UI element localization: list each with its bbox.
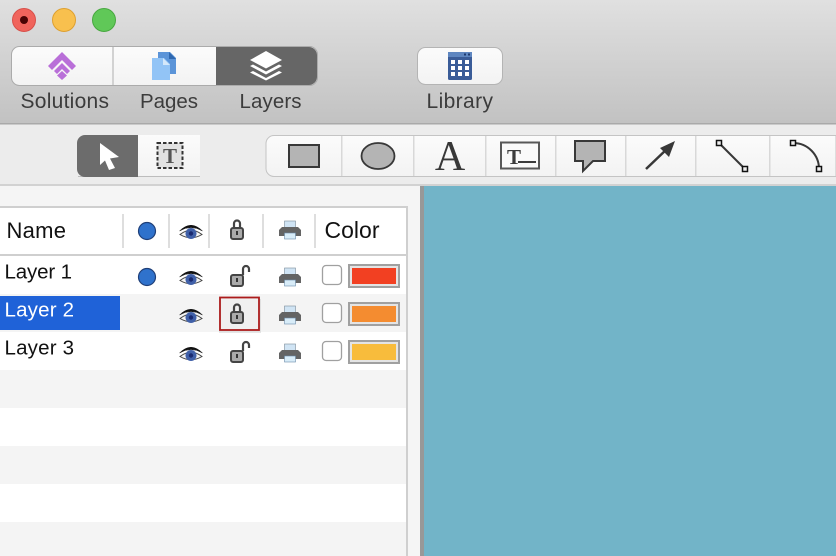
icon: layers	[250, 51, 282, 80]
column header: printer	[279, 221, 301, 239]
active dot	[138, 268, 156, 286]
icon: text box: T	[507, 145, 521, 169]
printer	[279, 344, 301, 362]
icon: library	[448, 52, 472, 80]
column header: active dot	[138, 222, 156, 240]
open lock	[231, 266, 249, 286]
window button: zoom	[92, 8, 116, 32]
title bar	[0, 0, 836, 124]
label: Library: Library	[426, 90, 494, 113]
label: Pages: Pages	[140, 90, 198, 113]
color swatch: orange	[348, 302, 400, 326]
layer name: Layer 1	[4, 260, 72, 284]
layer name: Layer 3	[4, 336, 74, 360]
icon: line	[716, 140, 748, 172]
selection tool group	[77, 135, 200, 177]
icon: ellipse	[362, 143, 394, 169]
printer	[279, 268, 301, 286]
color swatch: red	[348, 264, 400, 288]
tools toolbar	[0, 124, 836, 186]
icon: rectangle	[289, 145, 319, 167]
library button	[418, 48, 502, 84]
row: Layer 3	[4, 336, 400, 364]
eye	[180, 347, 202, 361]
segmented tabs	[12, 46, 318, 86]
color swatch: yellow	[348, 340, 400, 364]
checkbox	[322, 342, 342, 360]
eye	[180, 271, 202, 285]
icon: text selection: T	[163, 144, 177, 168]
column header: eye	[180, 225, 202, 239]
icon: solutions	[48, 52, 76, 80]
selection highlight	[0, 296, 120, 330]
icon: pages	[152, 52, 176, 80]
icon: text box	[501, 142, 539, 169]
window button: minimize	[52, 8, 76, 32]
eye	[180, 309, 202, 323]
checkbox	[322, 304, 342, 322]
closed lock	[231, 304, 243, 323]
icon: arrow	[646, 141, 675, 169]
shape tools group	[266, 134, 836, 180]
icon: speech bubble	[575, 141, 605, 171]
column header: lock	[231, 220, 243, 239]
window button: close	[12, 8, 36, 32]
open lock	[231, 342, 249, 362]
checkbox	[322, 266, 342, 284]
icon: text A: A	[435, 134, 466, 180]
label: Solutions: Solutions	[20, 90, 109, 113]
icon: curve	[790, 140, 822, 172]
column header: Color: Color	[324, 217, 380, 243]
layer name: Layer 2	[4, 298, 74, 322]
highlight box	[219, 298, 261, 333]
icon: arrow cursor	[100, 143, 119, 170]
label: Layers: Layers	[240, 90, 302, 113]
printer	[279, 306, 301, 324]
canvas	[420, 186, 836, 556]
row: Layer 2	[0, 296, 400, 333]
row: Layer 1	[4, 260, 400, 288]
column header: Name: Name	[6, 218, 66, 243]
layers table	[0, 206, 408, 556]
